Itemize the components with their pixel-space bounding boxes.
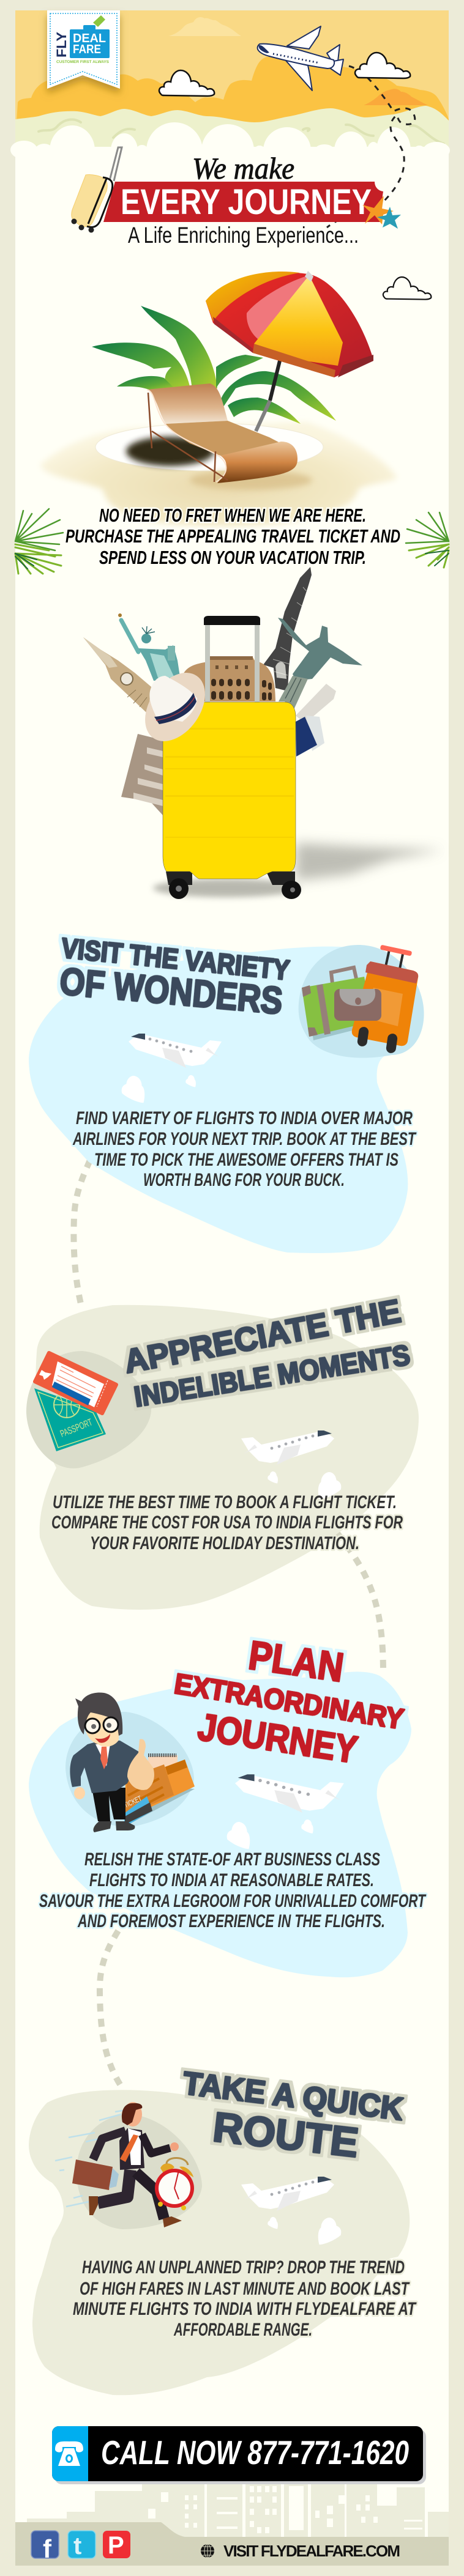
airplane — [241, 1430, 334, 1465]
tie — [120, 2134, 138, 2162]
heading line 1: VISIT THE VARIETY — [60, 932, 291, 986]
heading line 2: INDELIBLE MOMENTS — [132, 1339, 412, 1413]
alarm clock — [155, 2158, 194, 2210]
logo word fare: FARE — [73, 43, 101, 56]
palm leaves right — [406, 513, 449, 568]
logo ribbon — [47, 10, 120, 89]
faint birds on green layer — [39, 119, 444, 144]
passport label: PASSPORT — [59, 1417, 94, 1440]
shirt — [128, 2128, 141, 2165]
airplane illustration — [258, 26, 343, 91]
passport and ticket icon — [34, 1353, 116, 1451]
heading line 2: OF WONDERS — [58, 960, 284, 1023]
colosseum — [182, 656, 275, 701]
yellow suitcase beside title — [71, 147, 122, 232]
shoes — [89, 2196, 98, 2215]
cloud large — [318, 2218, 341, 2245]
logo word fly: FLY — [54, 32, 69, 57]
title script: we make: We make — [192, 151, 294, 185]
cloud large — [122, 1076, 144, 1103]
phone icon — [55, 2441, 83, 2466]
umbrella pole lower — [256, 401, 270, 431]
heading line 1: APPRECIATE THE — [121, 1293, 403, 1380]
luggage wheels and bases — [166, 872, 301, 899]
man hand — [74, 1787, 85, 1799]
umbrella pole — [270, 361, 280, 401]
man face — [84, 1708, 119, 1747]
beige blob — [36, 1305, 419, 1610]
body text — [72, 1108, 417, 1190]
heading journey: JOURNEY — [195, 1706, 360, 1772]
cloud large — [318, 1472, 341, 1499]
man jacket — [70, 1741, 141, 1793]
outlined cloud small — [383, 277, 431, 300]
man glasses — [85, 1717, 118, 1733]
body text — [39, 1849, 427, 1931]
starfish teal — [377, 207, 401, 229]
twitter letter: t — [73, 2533, 81, 2559]
title banner — [103, 182, 383, 222]
logo tagline: CUSTOMER FIRST ALWAYS — [56, 61, 109, 64]
stone pillars — [121, 734, 163, 815]
blue blob — [29, 947, 423, 1253]
white hills — [10, 122, 450, 179]
grey dashed route 2 — [337, 1533, 383, 1675]
briefcase — [72, 2160, 113, 2190]
papers — [109, 2168, 119, 2188]
notebook — [148, 1755, 178, 1774]
heading line 2: ROUTE — [211, 2103, 361, 2166]
leaning tower of pisa — [296, 684, 336, 724]
blue phone tab — [52, 2426, 88, 2481]
shadow below chair — [190, 470, 312, 490]
darker circle behind man — [65, 1712, 194, 1827]
button shadow — [54, 2429, 426, 2484]
pale background cloud — [168, 17, 241, 36]
title: every journey: EVERY JOURNEY — [121, 182, 372, 222]
pinterest icon — [103, 2531, 130, 2559]
yellow luggage with landmarks — [83, 567, 444, 899]
cloud small — [301, 1819, 313, 1834]
torso — [119, 2128, 144, 2170]
city skyline — [27, 2483, 449, 2540]
globe icon — [201, 2544, 214, 2558]
pale green cloud layer — [15, 106, 449, 150]
hair — [122, 2103, 142, 2125]
twitter icon — [68, 2531, 95, 2559]
big ben — [83, 637, 151, 712]
line 4: AFFORDABLE RANGE. — [173, 2320, 312, 2340]
call now button — [52, 2426, 426, 2484]
website text: VISIT FLYDEALFARE.COM — [223, 2542, 400, 2560]
pinterest letter: P — [108, 2532, 124, 2559]
section 2: appreciate the indelible moments — [26, 1293, 419, 1610]
body text — [73, 2257, 417, 2340]
heading extraordinary: EXTRAORDINARY — [172, 1668, 406, 1735]
cloud small — [185, 1075, 196, 1087]
front leg — [136, 2172, 164, 2219]
subtitle: A Life Enriching Experience... — [128, 223, 359, 248]
footer band — [15, 2522, 449, 2566]
outlined cloud left — [159, 70, 214, 96]
man mouth — [95, 1734, 110, 1743]
cloud small — [268, 1471, 278, 1483]
floor shadow right — [296, 843, 444, 881]
blue suitcase logo — [70, 29, 110, 58]
darker circle behind runner — [77, 2114, 202, 2229]
eiffel tower — [263, 567, 312, 691]
cloud small — [268, 2217, 278, 2229]
luggage body — [163, 702, 296, 879]
lounge chair — [147, 383, 297, 483]
palm leaves left — [15, 509, 63, 574]
darker circle behind luggage — [299, 945, 424, 1058]
dashed black flight path — [327, 66, 415, 228]
heading line 1: TAKE A QUICK — [181, 2065, 405, 2127]
businessman with thumbs up and ticket — [70, 1693, 195, 1832]
intro line 3: SPEND LESS ON YOUR VACATION TRIP. — [99, 547, 366, 568]
luggage tag — [93, 15, 105, 27]
grey dashed route 1 — [73, 1160, 90, 1306]
section 1: visit the variety of wonders — [29, 932, 424, 1253]
small orange cloud — [364, 89, 428, 105]
beach scene — [40, 271, 397, 526]
christ the redeemer — [278, 618, 362, 709]
cloud large — [227, 1822, 250, 1849]
beige blob — [29, 2090, 410, 2395]
luggage ridges — [165, 728, 294, 838]
arm front — [142, 2134, 170, 2153]
speed lines — [55, 2111, 122, 2207]
intro paragraph — [65, 505, 400, 568]
line 3: YOUR FAVORITE HOLIDAY DESTINATION. — [90, 1533, 359, 1553]
rear leg — [98, 2170, 130, 2203]
running businessman with clock — [55, 2102, 194, 2227]
passport — [296, 716, 324, 757]
man hair — [75, 1693, 122, 1736]
section 3: plan extraordinary journey — [29, 1632, 427, 1977]
leaf group — [92, 306, 336, 424]
starfish orange — [362, 196, 394, 224]
arm back — [93, 2131, 125, 2160]
blue blob — [29, 1671, 411, 1977]
straw hat — [133, 662, 217, 752]
white ellipse — [95, 423, 323, 471]
man shoes — [93, 1821, 111, 1832]
header sky — [10, 10, 450, 179]
luggage icon — [302, 945, 418, 1054]
man legs — [92, 1788, 125, 1821]
outlined cloud right — [355, 53, 410, 78]
airplane — [235, 1774, 344, 1813]
ticket tag label: TICKET — [122, 1794, 143, 1810]
section 4: take a quick route — [29, 2065, 417, 2395]
luggage pull handle — [204, 616, 260, 703]
airplane — [129, 1034, 222, 1068]
man pupils — [91, 1723, 111, 1729]
head — [124, 2102, 142, 2126]
button black body — [52, 2426, 423, 2481]
sand — [40, 422, 397, 526]
orange cloud layer — [17, 57, 449, 128]
darker circle behind passport — [26, 1351, 151, 1468]
statue of liberty — [118, 613, 181, 681]
fist — [170, 2142, 179, 2151]
floor shadow bottom — [153, 879, 300, 897]
shadow under chair — [126, 437, 214, 466]
logo word deal: DEAL — [73, 32, 106, 45]
front shoe — [163, 2216, 182, 2227]
heading plan: PLAN — [246, 1632, 346, 1690]
airplane — [241, 2177, 334, 2211]
facebook letter: f — [43, 2534, 52, 2563]
grey dashed route 3 — [100, 1931, 123, 2089]
thumb up — [127, 1739, 154, 1790]
facebook icon — [31, 2531, 59, 2563]
umbrella canopy — [206, 271, 373, 377]
line 4: WORTH BANG FOR YOUR BUCK. — [143, 1170, 345, 1190]
body text — [51, 1492, 403, 1553]
large ticket — [125, 1786, 195, 1824]
